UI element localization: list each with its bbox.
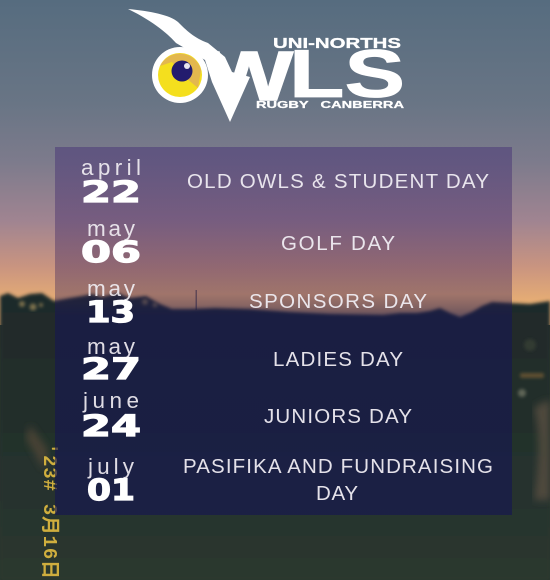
- date: may 27: [81, 334, 141, 386]
- event: Pasifika and Fundraising Day: [183, 455, 493, 505]
- camera date stamp: '23# 3月16日: [38, 443, 60, 579]
- event: Pasifika and Fundraising Day: PASIFIKA AND FUNDRAISING: [183, 455, 493, 478]
- tower on the hill: [196, 290, 197, 310]
- event: Golf Day: GOLF DAY: [281, 232, 395, 255]
- logo swoosh and beak: [128, 9, 250, 122]
- panel background: [55, 147, 512, 515]
- sunlit foliage: [19, 299, 158, 310]
- date: may 06: [81, 216, 141, 269]
- logo text: Rugby Canberra: RUGBY CANBERRA: [256, 99, 405, 111]
- logo wordmark LS: LS: [289, 36, 405, 112]
- treeline and ground: [0, 293, 550, 580]
- date: may 13: 13: [86, 295, 135, 329]
- date: july 01: july: [87, 454, 135, 479]
- date: may 06: may: [87, 216, 136, 241]
- date: may 13: [86, 276, 136, 329]
- crowd figure at left: [26, 425, 48, 470]
- event: Old Owls and Student Day: OLD OWLS & STUDENT DAY: [187, 170, 489, 193]
- logo: Uni-Norths Owls Rugby Canberra: [128, 9, 405, 122]
- date: may 13: may: [87, 276, 136, 301]
- logo text: Uni-Norths: UNI-NORTHS: [273, 36, 401, 52]
- date: july 01: [87, 454, 135, 507]
- date: april 22: april: [81, 155, 141, 180]
- date: april 22: [81, 155, 141, 209]
- event: Juniors Day: JUNIORS DAY: [264, 405, 412, 428]
- date: may 27: may: [87, 334, 136, 359]
- event: Sponsors Day: SPONSORS DAY: [249, 290, 427, 313]
- date: june 24: june: [82, 388, 139, 413]
- crowd figure at right: [534, 400, 550, 500]
- date: june 24: 24: [81, 409, 141, 443]
- event: Ladies Day: LADIES DAY: [273, 348, 403, 371]
- date: july 01: 01: [87, 473, 135, 507]
- logo wordmark W: W: [205, 37, 293, 115]
- date: may 06: 06: [81, 235, 141, 269]
- logo eye: [152, 47, 208, 103]
- date: may 27: 27: [81, 352, 141, 386]
- sunset sky: [0, 0, 550, 325]
- panel: event schedule: [55, 147, 512, 515]
- date: april 22: 22: [81, 175, 141, 209]
- event: Pasifika and Fundraising Day: DAY: [316, 482, 358, 505]
- crowd highlights at right: [518, 339, 544, 397]
- date: june 24: [81, 388, 141, 443]
